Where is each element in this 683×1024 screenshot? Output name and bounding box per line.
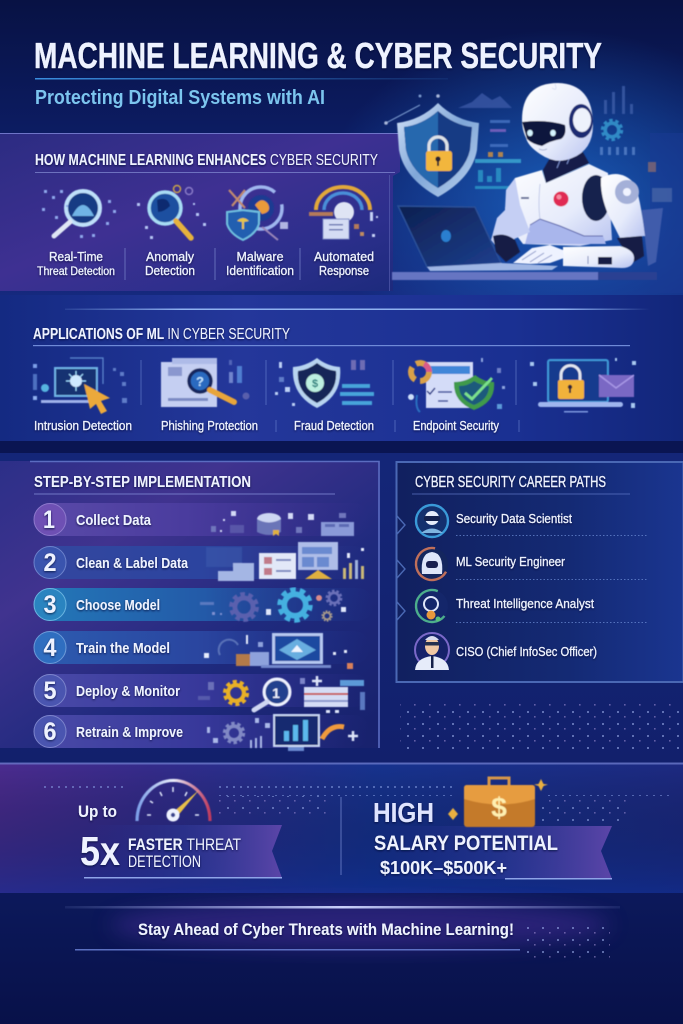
icon: fraud detection — [275, 358, 374, 408]
stat: 5x faster threat detection: 5x — [80, 828, 120, 874]
icon: automated response — [309, 187, 378, 239]
panel: call to action — [65, 901, 620, 958]
stat: 5x faster threat detection: DETECTION — [128, 853, 201, 871]
icon: intrusion detection — [33, 358, 127, 414]
label: anomaly detection — [145, 250, 195, 278]
hero background tech decoration — [384, 86, 672, 202]
panel heading: HOW MACHINE LEARNING ENHANCES CYBER SECURITY — [35, 152, 378, 169]
illustration: robot — [491, 83, 663, 268]
stat: high salary potential: SALARY POTENTIAL — [374, 832, 558, 855]
career: security data scientist: Security Data Scientist — [456, 511, 572, 526]
step 3: choose model: Choose Model — [76, 597, 160, 614]
icon: fraud detection: $ — [312, 378, 318, 390]
label: automated response: Automated — [314, 250, 374, 264]
step 4: train the model — [34, 631, 370, 669]
icon: anomaly detection — [137, 186, 206, 239]
stat: high salary potential: HIGH — [373, 797, 434, 828]
left arm — [491, 178, 530, 250]
step 1: collect data — [34, 503, 370, 536]
panel: how machine learning enhances cyber security — [0, 133, 400, 291]
head — [522, 83, 593, 161]
career: threat intelligence analyst — [409, 583, 648, 629]
panel: applications of ML — [0, 295, 683, 453]
label: real-time threat detection: Threat Detection — [37, 264, 115, 278]
torso — [505, 164, 612, 246]
step 5: deploy & monitor: 1 — [272, 685, 280, 701]
icon: speedometer — [137, 780, 210, 822]
illustration: table and laptop — [392, 206, 657, 280]
step 6: retrain & improve: 6 — [44, 718, 56, 746]
forearm — [563, 246, 634, 268]
career: ML security engineer: ML Security Engineer — [456, 554, 566, 569]
step 3: choose model — [34, 588, 374, 621]
icon: malware identification — [227, 187, 288, 240]
stat: 5x faster threat detection: Up to — [78, 802, 117, 821]
panel: step-by-step implementation — [0, 461, 380, 751]
illustration: shield with padlock — [397, 103, 479, 197]
stat: 5x faster threat detection — [78, 780, 282, 878]
call to action text: Stay Ahead of Cyber Threats with Machine Learning! — [138, 921, 514, 939]
career: security data scientist — [416, 505, 648, 537]
label: fraud detection: Fraud Detection — [294, 419, 374, 433]
step 2: clean & label data — [34, 542, 370, 581]
section heading: CYBER SECURITY CAREER PATHS — [415, 474, 606, 491]
icon: real-time threat detection — [42, 190, 116, 238]
step 4: train the model: 4 — [44, 634, 57, 662]
ribbon — [374, 826, 612, 880]
career: threat intelligence analyst: Threat Intelligence Analyst — [456, 596, 594, 611]
label: automated response: Response — [319, 264, 369, 278]
step 1: collect data: Collect Data — [76, 512, 152, 529]
label: anomaly detection: Detection — [145, 264, 195, 278]
label: intrusion detection: Intrusion Detection — [34, 419, 132, 433]
decorative dot field — [400, 702, 683, 750]
icon: briefcase — [448, 778, 548, 827]
section heading: APPLICATIONS OF ML IN CYBER SECURITY — [33, 326, 290, 343]
subtitle: Protecting Digital Systems with AI — [35, 87, 325, 109]
career: CISO: CISO (Chief InfoSec Officer) — [456, 644, 597, 659]
label: malware identification: Identification — [226, 264, 294, 278]
step 5: deploy & monitor: Deploy & Monitor — [76, 683, 180, 700]
stat: 5x faster threat detection: FASTER THREAT — [128, 835, 241, 854]
career: CISO — [415, 633, 597, 670]
step 6: retrain & improve — [34, 715, 370, 751]
icon: phishing protection — [161, 358, 250, 407]
step 2: clean & label data: 2 — [44, 549, 56, 577]
right upper arm and shoulder — [601, 174, 645, 238]
label: phishing protection: Phishing Protection — [161, 419, 258, 433]
label: real-time threat detection: Real-Time — [49, 250, 103, 264]
hand — [513, 245, 564, 264]
chest dark joint — [582, 175, 610, 221]
panel: cyber security career paths — [396, 462, 683, 682]
step 5: deploy & monitor — [34, 674, 370, 713]
icon: briefcase: $ — [491, 792, 507, 823]
label: automated response — [314, 250, 374, 278]
step 5: deploy & monitor: 5 — [44, 677, 57, 705]
label: malware identification: Malware — [236, 250, 284, 264]
label: malware identification — [226, 250, 294, 278]
stat: high salary potential — [373, 778, 612, 880]
chair — [642, 208, 663, 266]
step 2: clean & label data: Clean & Label Data — [76, 555, 189, 572]
neck — [543, 147, 589, 183]
step 1: collect data: 1 — [43, 506, 55, 534]
icon: endpoint security — [408, 358, 505, 412]
icon: phishing protection: ? — [196, 374, 204, 389]
elbow — [617, 236, 644, 263]
step 6: retrain & improve: Retrain & Improve — [76, 724, 183, 741]
panel: statistics band — [0, 762, 683, 893]
step 4: train the model: Train the Model — [76, 640, 170, 657]
label: real-time threat detection — [37, 250, 115, 278]
career: ML security engineer — [410, 542, 648, 586]
icon: laptop with padlock and envelope — [530, 358, 636, 412]
section heading: STEP-BY-STEP IMPLEMENTATION — [34, 474, 251, 491]
step 3: choose model: 3 — [44, 591, 56, 619]
label: endpoint security: Endpoint Security — [413, 419, 500, 433]
stat: high salary potential: $100K–$500K+ — [380, 858, 507, 878]
label: anomaly detection: Anomaly — [146, 250, 195, 264]
ribbon — [82, 825, 282, 878]
